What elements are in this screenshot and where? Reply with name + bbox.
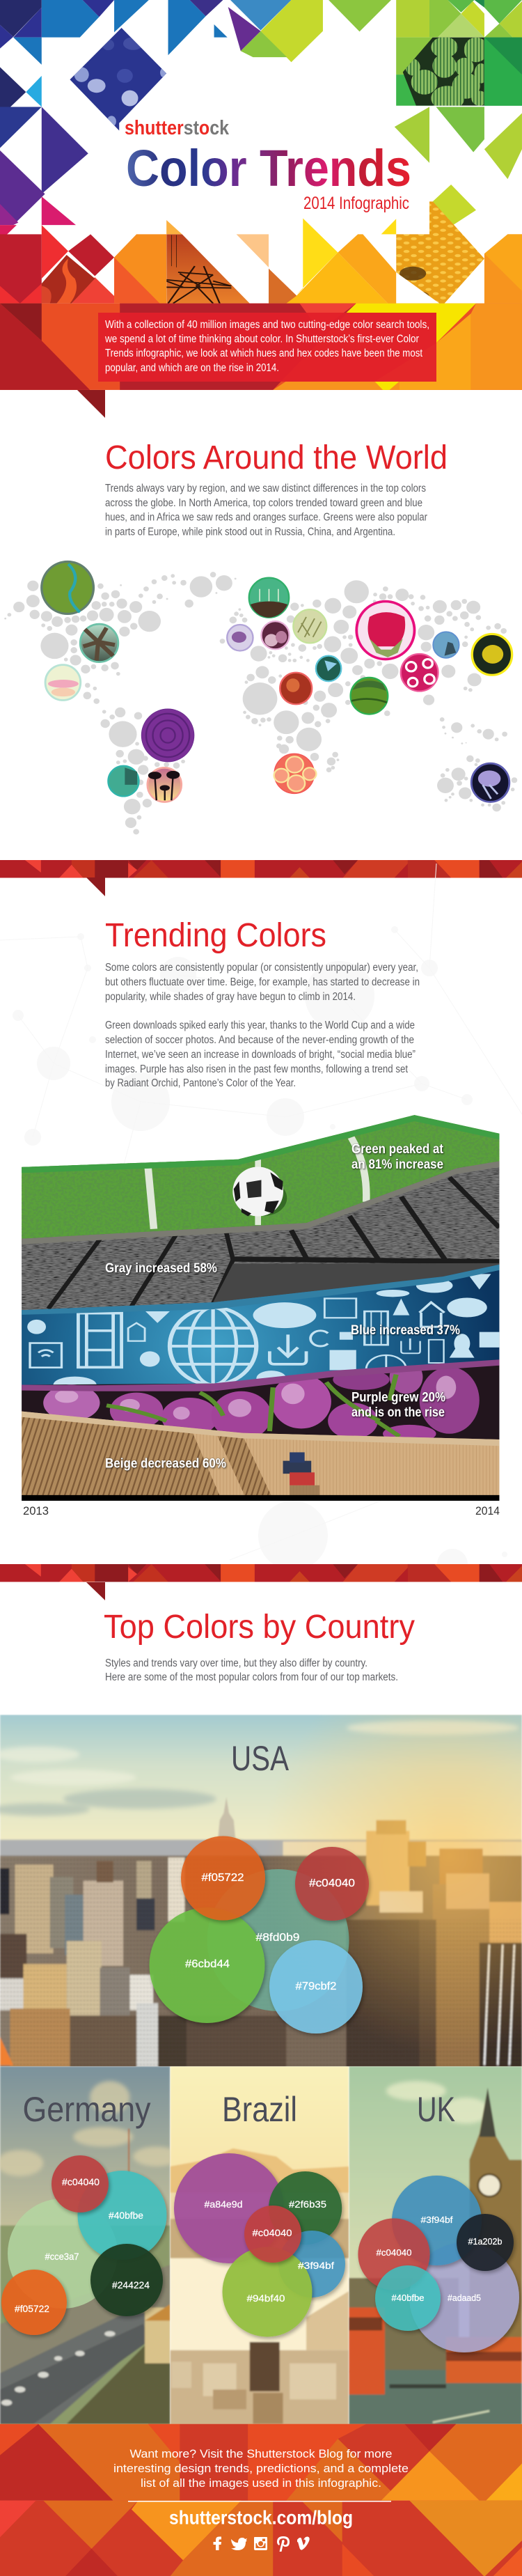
line: beige (22, 1412, 499, 1446)
bubble: seedlings in soil (249, 578, 289, 618)
colour bubbles: Brazil (174, 2153, 345, 2337)
panel: colors around the world (4, 439, 517, 834)
footer triangle mosaic (0, 2424, 522, 2576)
colour bubbles: USA: #c04040 (309, 1878, 355, 1889)
line: purple (22, 1359, 499, 1391)
bubble: blue butterfly (316, 656, 341, 681)
panel: footer (0, 2424, 522, 2576)
paragraph: Styles and trends vary over time, but they also differ by country. (105, 1657, 367, 1669)
colour bubbles: USA: #f05722 (202, 1872, 244, 1884)
colour bubbles: Germany: #c04040 (62, 2176, 100, 2187)
icon: facebook (213, 2536, 221, 2550)
chart labels (105, 1142, 460, 1471)
bubble: grapefruit slices (274, 754, 316, 793)
bubble: purple dahlia (141, 709, 194, 762)
bubble: pink rose (356, 602, 414, 659)
chart labels: Beige decreased 60% (105, 1457, 226, 1471)
footer link: shutterstock.com/blog (169, 2507, 353, 2528)
bubble: garlic (261, 621, 290, 649)
chart labels: Purple grew 20% (351, 1390, 445, 1405)
country name: UK: UK (417, 2090, 455, 2129)
paragraphs: Internet, we’ve seen an increase in downloads of bright, “social media blue” (105, 1049, 416, 1061)
subtitle: 2014 Infographic (303, 194, 409, 213)
panel: trending colors (0, 864, 522, 1579)
colour bubbles: USA (149, 1836, 369, 2034)
colour bubbles: Germany (1, 2155, 167, 2335)
colour bubbles: USA: #8fd0b9 (256, 1932, 300, 1944)
colour bubbles: UK (358, 2176, 519, 2352)
paragraphs: Green downloads spiked early this year, thanks to the World Cup and a wide (105, 1020, 415, 1031)
paragraph: in parts of Europe, while pink stood out in Russia, China, and Argentina. (105, 526, 395, 538)
fold arrow (86, 1582, 105, 1600)
footer call to action: list of all the images used in this infographic. (141, 2476, 381, 2490)
country name: Germany: Germany (22, 2090, 150, 2129)
paragraphs: but others fluctuate over time. Beige, for example, has started to decrease in (105, 976, 420, 988)
line: blue (22, 1265, 499, 1315)
logo: shutterstock: shutterstock (125, 117, 230, 139)
bubble: lilac bowl (227, 625, 253, 651)
colour bubbles: Brazil: #94bf40 (246, 2293, 285, 2304)
heading: Colors Around the World (105, 439, 448, 476)
photo: New York skyline (0, 1715, 522, 2067)
colour bubbles: UK: #40bfbe (391, 2293, 425, 2303)
colour bubbles: UK: #3f94bf (420, 2215, 453, 2225)
paragraph: hues, and in Africa we saw reds and oranges surface. Greens were also popular (105, 511, 427, 524)
panel: hero header (0, 0, 522, 390)
bubble: jellyfish (471, 763, 509, 802)
colour bubbles: Brazil: #2f6b35 (289, 2199, 326, 2210)
photo: Rio de Janeiro (170, 2066, 349, 2426)
layer: green grass with soccer ball (22, 1115, 499, 1244)
paragraph: Trends always vary by region, and we saw distinct differences in the top colors (105, 483, 426, 494)
footer call to action: Want more? Visit the Shutterstock Blog for more (129, 2447, 393, 2460)
panel: top colors by country (0, 1609, 522, 2426)
colour bubbles: UK: #c04040 (376, 2247, 412, 2258)
bubble: pink swirl pattern (401, 654, 438, 692)
icon: pinterest (277, 2536, 290, 2552)
paragraphs: popularity, while shades of gray have begun to climb in 2014. (105, 991, 356, 1003)
heading: Trending Colors (105, 917, 326, 954)
bubble: pale grass (293, 609, 326, 643)
icon: instagram (254, 2537, 267, 2550)
colour bubbles: USA: #79cbf2 (295, 1981, 337, 1992)
paragraph: across the globe. In North America, top colors trended toward green and blue (105, 497, 422, 509)
colour bubbles: Brazil: #3f94bf (298, 2260, 334, 2271)
icon: twitter (231, 2538, 247, 2550)
photo: electricity pylon (166, 234, 250, 304)
intro text box: With a collection of 40 million images and two cutting-edge color search tools, (105, 319, 429, 331)
heading: Top Colors by Country (104, 1609, 415, 1646)
bubble: blue sea rock (433, 632, 459, 658)
bubble: yellow mimosa (472, 634, 512, 675)
intro text box: popular, and which are on the rise in 2014. (105, 362, 279, 374)
chart labels: Gray increased 58% (105, 1261, 217, 1276)
paragraphs: Some colors are consistently popular (or consistently unpopular) every year, (105, 962, 418, 974)
colour bubbles: Germany: #cce3a7 (45, 2251, 79, 2262)
paragraphs: selection of soccer photos. And because of the never-ending growth of the (105, 1034, 414, 1046)
title: Color Trends (126, 139, 411, 197)
red divider band (0, 860, 522, 878)
layer: beige field with tractor (22, 1412, 499, 1496)
colour bubbles: Germany: #244224 (112, 2279, 150, 2290)
dotted world map (4, 572, 517, 834)
bubble: green forest river (42, 561, 93, 614)
layer: blue social media icons (22, 1265, 499, 1393)
hero triangle mosaic (0, 0, 522, 304)
fold arrow (77, 390, 105, 418)
bubble: macarons (45, 665, 81, 701)
photo: London (349, 2066, 522, 2426)
intro text box: we spend a lot of time thinking about color. In Shutterstock’s first-ever Color (104, 333, 419, 345)
chart labels: an 81% increase (351, 1157, 443, 1172)
icon: vimeo (297, 2536, 310, 2550)
intro text box (98, 313, 436, 382)
line: green (22, 1115, 499, 1173)
axis label: 2013: 2013 (23, 1504, 49, 1517)
paragraphs: images. Purple has also risen in the past few months, following a trend set (105, 1063, 409, 1075)
footer call to action (113, 2447, 409, 2490)
bubble: teal wall (108, 766, 139, 796)
intro text box: Trends infographic, we look at which hues and hex codes have been the most (105, 348, 423, 359)
chart labels: and is on the rise (351, 1405, 445, 1420)
layer: gray wood planks (22, 1161, 499, 1315)
axis label: 2014: 2014 (475, 1504, 500, 1517)
chart baseline (22, 1495, 499, 1501)
bubble: palm tree (80, 624, 118, 662)
country name: USA: USA (231, 1739, 290, 1778)
colour bubbles: Brazil: #c04040 (252, 2227, 292, 2238)
bubble: sunset palms (148, 767, 182, 802)
chart labels: Green peaked at (351, 1142, 444, 1157)
colour bubbles: Brazil: #a84e9d (205, 2199, 242, 2210)
social icons (213, 2536, 310, 2552)
red divider band (0, 1564, 522, 1582)
colour bubbles: UK: #1a202b (468, 2236, 503, 2247)
area chart: colour trends 2013-2014 (22, 1115, 499, 1501)
line: gray (22, 1161, 499, 1244)
bubble: red canyon (280, 673, 312, 704)
bottom intro band background (0, 304, 522, 390)
paragraph (105, 483, 427, 538)
faint network background (0, 864, 522, 1579)
photo: Berlin (0, 2066, 180, 2426)
fold arrow (86, 877, 105, 896)
colour bubbles: UK: #adaad5 (448, 2293, 481, 2303)
photo: honeycomb with bee (395, 201, 485, 304)
bubble: green hills (351, 678, 388, 715)
chart labels: Blue increased 37% (351, 1323, 460, 1338)
colour bubbles: USA: #6cbd44 (185, 1958, 230, 1970)
colour bubbles: Germany: #f05722 (15, 2303, 49, 2314)
paragraph (105, 1657, 398, 1683)
photo: red canyon (42, 255, 95, 304)
footer call to action: interesting design trends, predictions, and a complete (113, 2462, 409, 2475)
layer: purple eggplants (22, 1359, 499, 1446)
photo: watermelons (402, 38, 484, 106)
paragraphs: by Radiant Orchid, Pantone’s Color of the Year. (105, 1077, 296, 1089)
photo: jellyfish diamond (70, 28, 166, 131)
map photo bubbles (42, 561, 512, 802)
paragraphs (105, 962, 420, 1089)
paragraph: Here are some of the most popular colors from four of our top markets. (105, 1671, 398, 1683)
colour bubbles: Germany: #40bfbe (109, 2210, 143, 2221)
country name: Brazil: Brazil (222, 2090, 297, 2129)
